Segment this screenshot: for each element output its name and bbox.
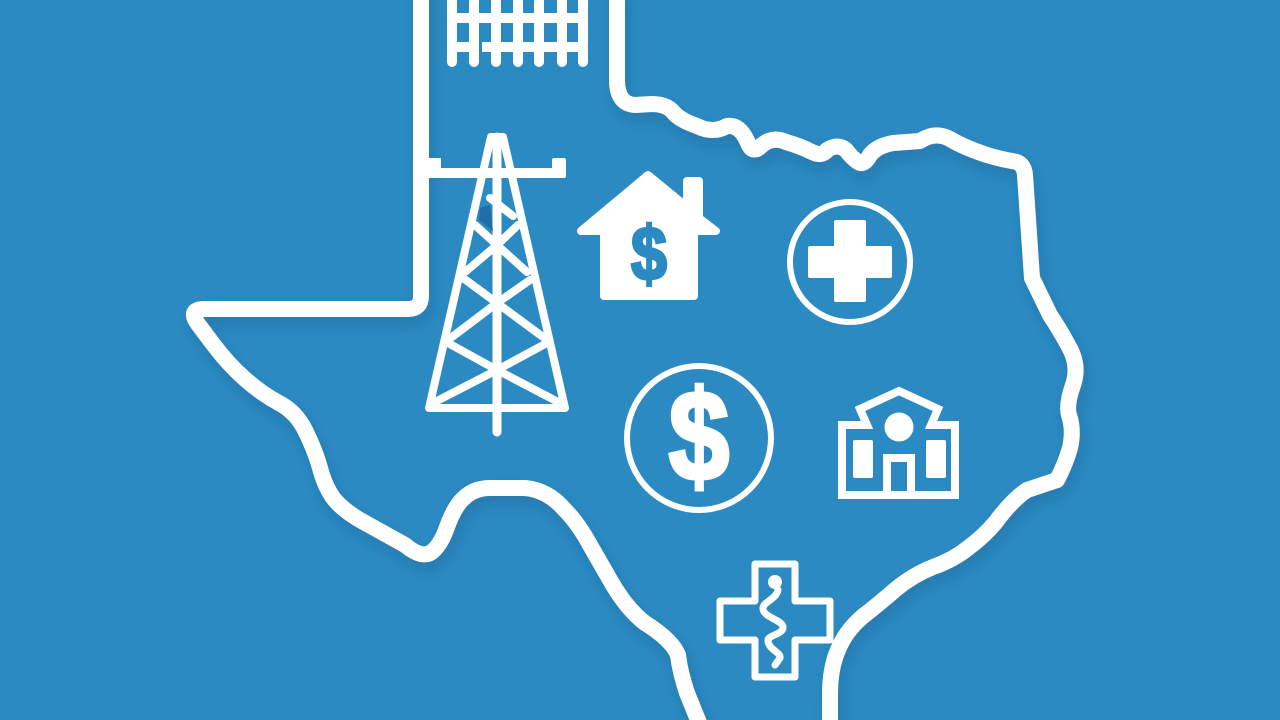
centre mast: [492, 137, 502, 432]
crossbar: [429, 158, 566, 178]
icon: hospital building: [842, 391, 955, 496]
icon: house with dollar: [581, 175, 716, 296]
dark notch: [479, 205, 493, 231]
icon: medical cross with serpent: [720, 564, 830, 677]
icon: circle with dollar: $: [669, 365, 729, 508]
tower legs and base: [429, 137, 565, 408]
serpent staff: [763, 590, 783, 665]
Texas state outline: [194, 0, 1076, 720]
icon: circle with dollar: [627, 365, 771, 510]
icon: circle with plus: [790, 202, 910, 322]
dollar sign: $: [631, 211, 667, 296]
lattice braces: [433, 198, 560, 403]
icon: border fence grid: [448, 0, 588, 62]
icon: oil derrick tower: [429, 137, 566, 432]
